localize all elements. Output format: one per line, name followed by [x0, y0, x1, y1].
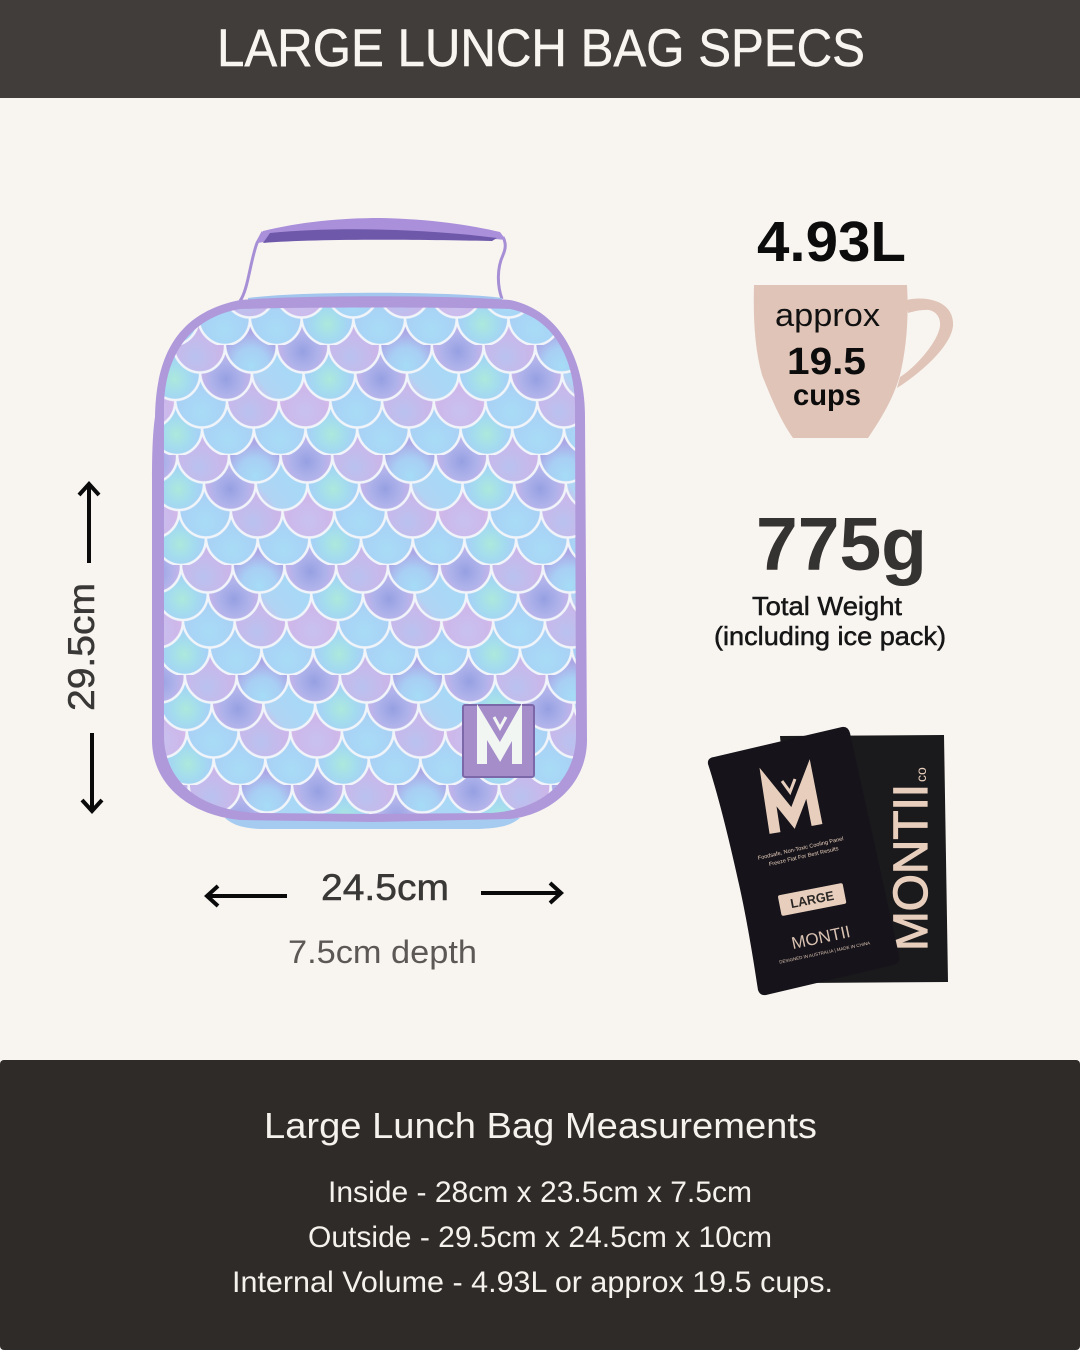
cup text: cups amount: 19.5	[787, 341, 866, 383]
cooling pack	[708, 727, 899, 995]
pack size label: LARGE	[789, 888, 835, 911]
cup body	[754, 285, 908, 438]
bag rim	[152, 296, 587, 822]
arrow: width left	[207, 886, 287, 906]
badge: M logo patch	[463, 705, 534, 777]
sleeve brand text: MONTII	[885, 784, 938, 951]
zipper strip and lower fabric	[248, 293, 502, 304]
height label: 29.5cm	[61, 583, 102, 711]
footer heading: Large Lunch Bag Measurements	[264, 1105, 817, 1146]
sleeve	[780, 735, 948, 983]
sleeve brand suffix: co	[913, 767, 929, 782]
weight caption	[714, 591, 946, 651]
ice pack and sleeve	[708, 727, 948, 995]
volume figure: 4.93L	[757, 210, 906, 274]
cup text: cups: cups	[793, 379, 861, 412]
weight caption: Total Weight	[752, 591, 903, 621]
cup handle	[897, 298, 953, 388]
arrow: height down	[82, 733, 102, 811]
weight caption: (including ice pack)	[714, 621, 946, 651]
pack M logo	[768, 779, 817, 833]
pack small print: Foodsafe, Non-Toxic Cooling Panel	[757, 836, 844, 862]
pack size label	[778, 883, 846, 916]
footer line: volume: Internal Volume - 4.93L or approx 19.5 cups.	[232, 1266, 833, 1299]
width label: 24.5cm	[321, 867, 449, 908]
icon: cup with capacity	[754, 285, 953, 438]
lunch bag illustration	[152, 218, 587, 829]
arrow: width right	[481, 883, 561, 903]
cup text: approx: approx	[775, 297, 880, 333]
arrow: height up	[79, 484, 99, 563]
header band with title	[0, 0, 1080, 98]
footer line: inside: Inside - 28cm x 23.5cm x 7.5cm	[328, 1176, 752, 1209]
weight figure: 775g	[756, 502, 927, 586]
depth label: 7.5cm depth	[288, 934, 477, 970]
scale pattern panel	[164, 308, 576, 814]
pack footer print: DESIGNED IN AUSTRALIA | MADE IN CHINA	[779, 940, 871, 965]
footer line: outside: Outside - 29.5cm x 24.5cm x 10cm	[308, 1221, 772, 1254]
pack brand: MONTII	[790, 922, 852, 953]
bag handle	[240, 218, 506, 301]
title: LARGE LUNCH BAG SPECS	[217, 19, 865, 78]
footer panel: measurements	[0, 1060, 1080, 1350]
pack small print: Freeze Flat For Best Results	[768, 846, 839, 868]
